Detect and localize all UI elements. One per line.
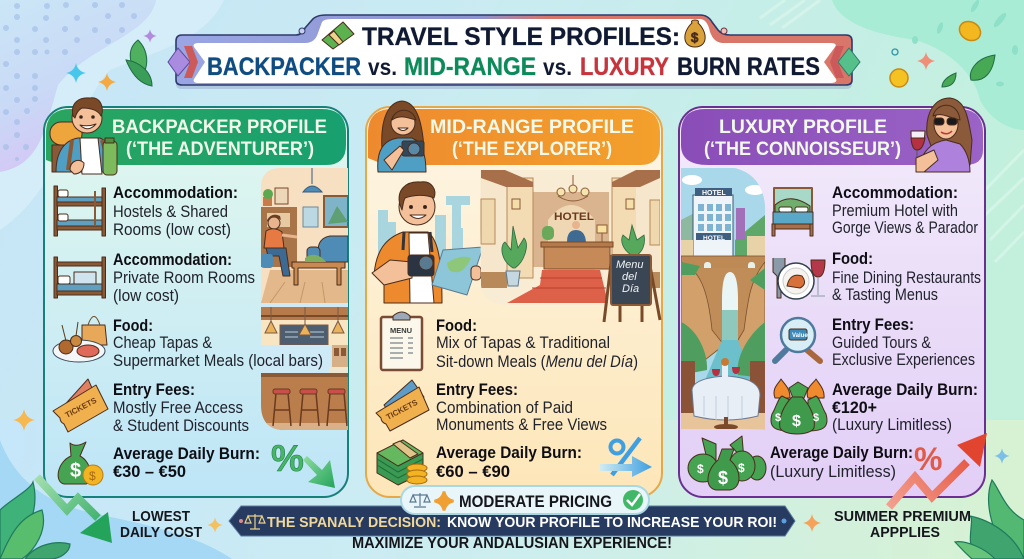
title line two [207, 53, 820, 81]
row: accommodation premium hotel: Gorge Views & Parador [832, 219, 978, 237]
icon: tickets: TICKETS [385, 397, 420, 422]
icon: red percent: % [914, 441, 942, 477]
icon: magnifying glass: Value [792, 333, 808, 339]
row: entry fees guided tours: Exclusive Experiences [832, 351, 975, 369]
icon: money bag: $ [691, 30, 699, 45]
row: average daily burn [377, 440, 582, 485]
row: entry fees guided tours: Entry Fees: [832, 315, 914, 334]
icon: pile of money bags [688, 436, 766, 490]
icon: gold scales [245, 514, 265, 529]
icon: fork plate and wine [773, 258, 825, 299]
row: accommodation hostels [54, 183, 238, 239]
row: average daily burn 120: €120+ [832, 398, 877, 417]
label: summer premium applies: SUMMER PREMIUM [834, 508, 971, 525]
icon: flaming money bags [771, 379, 827, 434]
row: food: Supermarket Meals (local bars) [113, 352, 323, 370]
row: food: Food: [113, 316, 153, 335]
backpacker header [46, 109, 346, 165]
row: entry fees guided tours: Guided Tours & [832, 334, 931, 352]
label: lowest daily cost [120, 508, 222, 541]
mid-range header: MID-RANGE PROFILE [430, 117, 634, 138]
closing line: MAXIMIZE YOUR ANDALUSIAN EXPERIENCE! [352, 535, 672, 552]
row: accommodation hostels: Accommodation: [113, 183, 238, 202]
row: average daily burn limitless: Average Daily Burn: [770, 443, 913, 462]
icon: check mark [623, 490, 643, 510]
illustration: menu del dia chalkboard: del [622, 271, 637, 283]
luxury header: (‘THE CONNOISSEUR’) [704, 139, 901, 160]
icon: green percent with down arrow: % [271, 438, 304, 479]
illustration: menu del dia chalkboard [604, 255, 660, 322]
illustration: hotel and ronda gorge: HOTEL [703, 235, 725, 242]
icon: menu clipboard [381, 312, 422, 370]
icon: magnifying glass [775, 318, 820, 361]
illustration: hotel lobby [480, 170, 660, 305]
row: accommodation private room: Accommodation: [113, 250, 232, 269]
title line two: BACKPACKER [207, 53, 361, 81]
coins, sparkles and leaves top right [890, 18, 995, 87]
icon: menu clipboard: MENU [390, 326, 412, 335]
row: food: Mix of Tapas & Traditional [436, 334, 610, 352]
decision banner: KNOW YOUR PROFILE TO INCREASE YOUR ROI! [447, 514, 777, 531]
row: food: Sit-down Meals (Menu del Día) [436, 353, 638, 371]
icon: flaming money bags: $ [792, 413, 801, 430]
illustration: man with map [372, 182, 483, 303]
panel: luxury profile [679, 98, 985, 497]
row: entry fees: Entry Fees: [113, 380, 195, 399]
row: food [53, 316, 323, 370]
row: average daily burn: €60 – €90 [436, 462, 510, 481]
row: food: Food: [436, 316, 477, 335]
title line two: vs. [368, 54, 397, 80]
row: average daily burn: Average Daily Burn: [113, 444, 260, 463]
icon: flaming money bags: $ [775, 412, 781, 424]
illustration: menu del dia chalkboard: Día [622, 283, 639, 295]
row: food fine dining: Fine Dining Restaurants [832, 269, 981, 287]
moderate pricing pill [401, 486, 649, 514]
label: lowest daily cost: DAILY COST [120, 524, 202, 541]
illustration: backpacker character [50, 98, 117, 175]
icon: pile of money bags: $ [738, 461, 745, 475]
backpacker header: (‘THE ADVENTURER’) [126, 139, 314, 160]
row: average daily burn 120 [771, 379, 978, 434]
icon: money bag with coin [58, 442, 103, 485]
row: food fine dining: Food: [832, 249, 873, 268]
icon: pile of money bags: $ [697, 462, 704, 476]
illustration: explorer woman with camera [378, 101, 426, 172]
illustration: hotel and ronda gorge [681, 168, 766, 430]
moderate pricing pill: MODERATE PRICING [459, 492, 612, 511]
illustration: menu del dia chalkboard: Menu [616, 259, 644, 271]
row: accommodation premium hotel [772, 183, 978, 237]
icon: blue percent with right arrow [600, 438, 652, 477]
row: average daily burn limitless [688, 436, 913, 490]
icon: cash stack and coins [377, 440, 427, 485]
row: food fine dining [773, 249, 981, 304]
title banner [168, 15, 860, 89]
label: summer premium applies: APPPLIES [870, 524, 940, 541]
icon: private room bed [54, 257, 106, 298]
icon: money bag with coin: $ [70, 460, 81, 482]
decorative foliage bottom right [955, 480, 1024, 559]
panel: backpacker profile [44, 98, 348, 497]
decision banner: THE SPANALY DECISION: [267, 514, 441, 531]
row: entry fees: & Student Discounts [113, 417, 249, 435]
icon: pile of money bags: $ [718, 468, 728, 488]
row: entry fees: Mostly Free Access [113, 399, 243, 417]
illustration: hotel and ronda gorge: HOTEL [702, 190, 726, 197]
icon: scales [410, 493, 430, 507]
row: accommodation premium hotel: Accommodation: [832, 183, 958, 202]
panel: mid-range profile [366, 101, 662, 497]
row: accommodation hostels: Hostels & Shared [113, 203, 228, 221]
arrow: red upward trend [889, 433, 987, 507]
row: average daily burn: Average Daily Burn: [436, 443, 582, 462]
row: entry fees guided tours [775, 315, 975, 369]
backpacker header: BACKPACKER PROFILE [112, 117, 327, 138]
row: average daily burn: €30 – €50 [113, 462, 186, 481]
illustration: connoisseur woman with wine [911, 98, 972, 172]
mid-range header [368, 109, 660, 165]
luxury header [681, 109, 983, 165]
icon: money bag with coin: $ [89, 469, 96, 483]
row: accommodation private room [54, 250, 255, 305]
row: food [381, 312, 638, 371]
icon: money bag [685, 20, 705, 47]
sparkles and decorative leaves top left [66, 30, 156, 91]
title line two: MID-RANGE [404, 53, 536, 81]
sparkles bottom [13, 409, 1010, 532]
icon: bunk bed [54, 186, 106, 236]
mid-range header: (‘THE EXPLORER’) [452, 139, 612, 160]
title line two: vs. [543, 54, 572, 80]
icon: bed with gorge view [772, 188, 813, 236]
icon: tickets: TICKETS [64, 395, 99, 420]
title line two: BURN RATES [677, 53, 820, 81]
icon: money stack [322, 22, 354, 49]
label: summer premium applies [834, 508, 971, 541]
row: food fine dining: & Tasting Menus [832, 286, 938, 304]
row: food: Cheap Tapas & [113, 334, 212, 352]
arrow: green downward trend [37, 477, 112, 543]
row: entry fees: Monuments & Free Views [436, 416, 607, 434]
row: average daily burn [58, 442, 260, 485]
row: accommodation premium hotel: Premium Hotel with [832, 202, 958, 220]
row: entry fees: Combination of Paid [436, 399, 573, 417]
row: accommodation private room: Private Room Rooms [113, 269, 255, 287]
icon: tapas plate and shopping bag [53, 316, 107, 362]
title line one: TRAVEL STYLE PROFILES: [362, 23, 680, 51]
decision banner [229, 506, 795, 536]
decorative foliage bottom left [0, 482, 70, 559]
illustration: hostel living room and tapas bar [261, 168, 348, 430]
icon: green percent with down arrow [271, 438, 335, 488]
row: entry fees [53, 379, 249, 435]
icon: tickets [53, 379, 108, 432]
illustration: hotel lobby: HOTEL [554, 211, 594, 223]
row: average daily burn 120: (Luxury Limitless) [832, 416, 952, 434]
row: accommodation private room: (low cost) [113, 287, 179, 305]
row: accommodation hostels: Rooms (low cost) [113, 221, 231, 239]
luxury header: LUXURY PROFILE [719, 117, 887, 138]
icon: flaming money bags: $ [813, 412, 819, 424]
row: entry fees: Entry Fees: [436, 380, 518, 399]
row: average daily burn limitless: (Luxury Limitless) [770, 463, 896, 481]
icon: tickets [376, 380, 429, 431]
title line two: LUXURY [580, 53, 669, 81]
row: entry fees [376, 380, 607, 434]
row: average daily burn 120: Average Daily Burn: [832, 380, 978, 399]
label: lowest daily cost: LOWEST [132, 508, 190, 525]
